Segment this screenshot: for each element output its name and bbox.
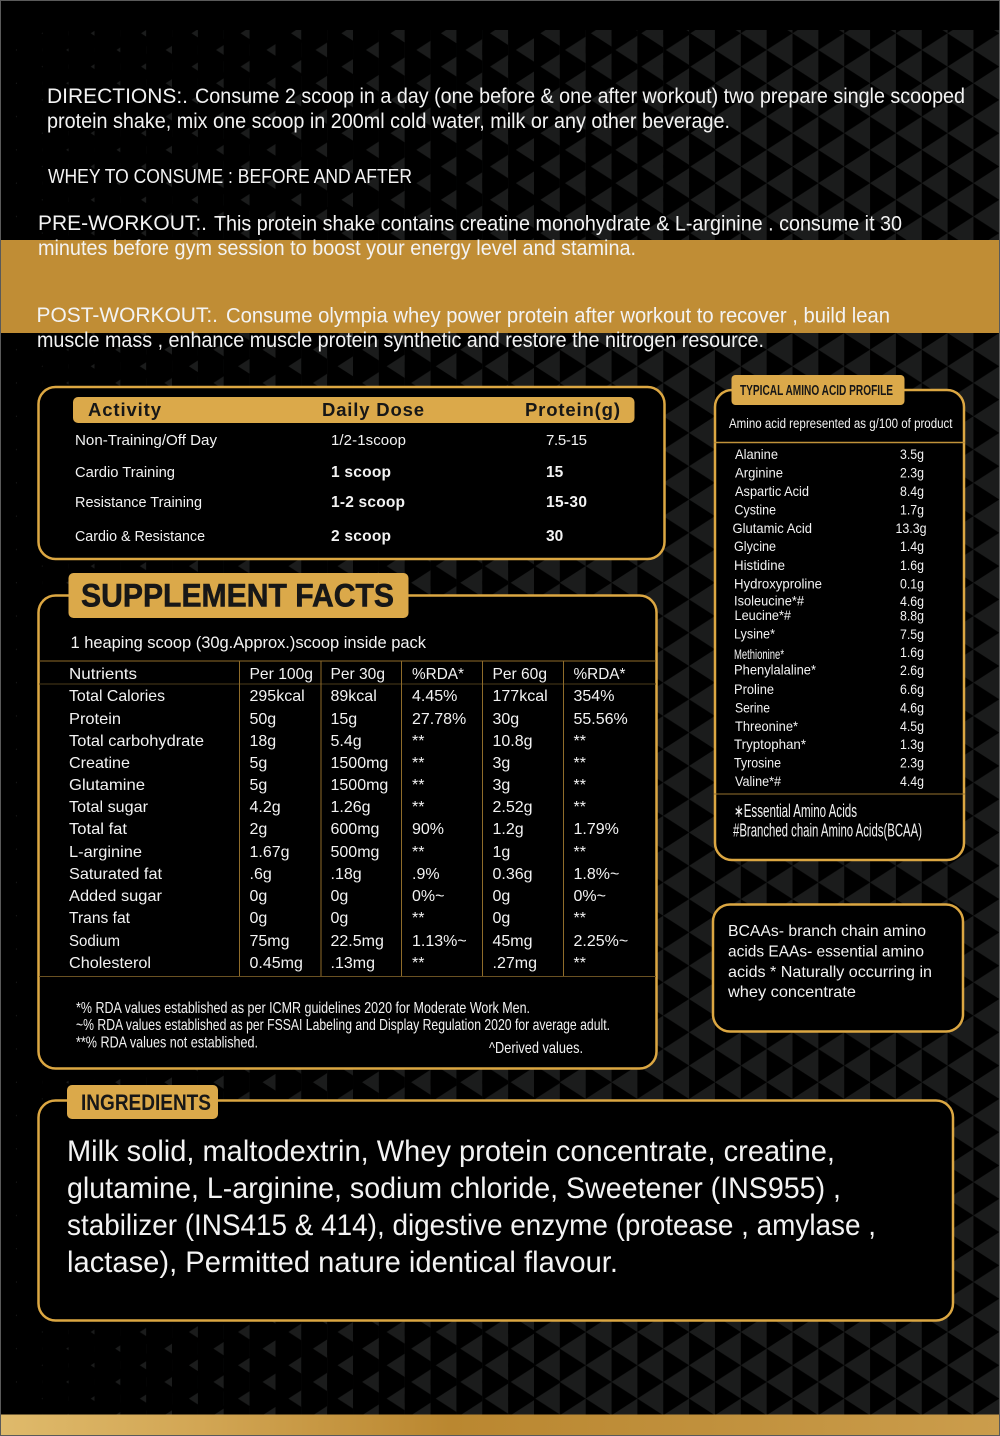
BCAA note text: whey concentrate <box>727 984 856 1001</box>
RDA footnotes: **% RDA values not established. <box>76 1034 258 1052</box>
nutrition facts table: 0.45mg <box>250 955 303 972</box>
nutrition facts table: 3g <box>492 777 510 794</box>
nutrition facts table: 1.26g <box>330 799 371 816</box>
nutrition facts table: ** <box>412 799 424 816</box>
nutrition facts table: .13mg <box>330 955 375 972</box>
pre-workout text block <box>38 211 902 260</box>
directions text block: protein shake, mix one scoop in 200ml cold water, milk or any other beverage. <box>47 110 730 133</box>
amino acid list: Hydroxyproline <box>734 576 822 592</box>
nutrition facts table: 1.67g <box>250 844 290 861</box>
nutrition facts table: 1500mg <box>330 755 388 772</box>
activity table rows: 2 scoop <box>331 528 391 545</box>
bottom gold gradient bar <box>0 1414 1000 1435</box>
nutrition facts table: Total fat <box>69 821 128 838</box>
BCAA note text <box>727 923 932 1001</box>
nutrition facts table: 5.4g <box>330 733 362 750</box>
amino acid list: Alanine <box>735 446 778 462</box>
nutrition facts table: 2.25%~ <box>574 933 628 950</box>
activity table header bar <box>73 397 634 423</box>
panel: BCAA note <box>713 904 963 1032</box>
amino acid list: 3.5g <box>900 446 924 462</box>
amino acid list: Leucine*# <box>734 607 791 623</box>
nutrition facts table: 4.45% <box>412 688 457 705</box>
activity table header bar: Activity <box>88 399 162 420</box>
nutrition facts table: Total sugar <box>69 799 149 816</box>
nutrition facts table: 75mg <box>250 933 290 950</box>
activity table rows: 30 <box>546 528 563 545</box>
ingredients text: stabilizer (INS415 & 414), digestive enzyme (protease , amylase , <box>67 1209 876 1242</box>
nutrition facts table: 27.78% <box>412 711 466 728</box>
nutrition facts table: ** <box>574 910 586 927</box>
nutrition facts table: Sodium <box>69 933 120 950</box>
amino acid list: 4.4g <box>900 773 924 789</box>
post-workout text block <box>36 303 890 352</box>
activity table rows: Non-Training/Off Day <box>75 432 218 449</box>
nutrition facts table: ** <box>574 733 586 750</box>
nutrition facts table: 354% <box>574 688 614 705</box>
post-workout text block: POST-WORKOUT:. <box>36 303 218 327</box>
post-workout text block: muscle mass , enhance muscle protein synthetic and restore the nitrogen resource. <box>37 329 764 352</box>
amino acid footnotes: ∗Essential Amino Acids <box>734 801 857 821</box>
nutrition facts table: 30g <box>492 711 519 728</box>
amino acid list: 7.5g <box>900 626 924 642</box>
directions text block: Consume 2 scoop in a day (one before & one after workout) two prepare single scooped <box>195 85 965 108</box>
nutrition facts table: ** <box>574 955 586 972</box>
amino acid list: 0.1g <box>900 576 924 592</box>
amino acid list: Methionine* <box>734 646 784 662</box>
amino acid list: Valine*# <box>735 773 781 789</box>
pre-workout text block: This protein shake contains creatine monohydrate & L-arginine . consume it 30 <box>214 212 902 236</box>
nutrition facts table: 295kcal <box>250 688 305 705</box>
amino acid list: Serine <box>735 700 770 716</box>
nutrition facts table: Nutrients <box>69 666 137 683</box>
RDA footnotes <box>76 1000 610 1057</box>
nutrition facts table: 0%~ <box>574 888 606 905</box>
amino acid subtitle: Amino acid represented as g/100 of product <box>729 416 953 431</box>
nutrition facts table: 5g <box>250 777 267 794</box>
nutrition facts table: 1.13%~ <box>412 933 467 950</box>
amino acid list: Isoleucine*# <box>734 592 804 608</box>
nutrition facts table: Per 100g <box>250 666 313 683</box>
nutrition facts table: 50g <box>250 711 276 728</box>
nutrition facts table: 2g <box>250 821 267 838</box>
RDA footnotes: *% RDA values established as per ICMR guidelines 2020 for Moderate Work Men. <box>76 1000 530 1017</box>
amino acid list: Arginine <box>735 464 783 480</box>
nutrition facts table: Total Calories <box>69 688 165 705</box>
activity table header bar: Protein(g) <box>525 399 620 420</box>
amino acid list: Proline <box>734 681 774 697</box>
nutrition facts table: %RDA* <box>412 666 464 683</box>
nutrition facts table: 3g <box>492 755 510 772</box>
amino acid list: 4.5g <box>900 718 924 734</box>
amino acid list: 2.3g <box>900 754 924 770</box>
nutrition facts table: Saturated fat <box>69 866 163 883</box>
BCAA note text: BCAAs- branch chain amino <box>728 923 926 940</box>
ingredients text: lactase), Permitted nature identical flavour. <box>67 1246 618 1279</box>
nutrition facts table: ** <box>574 755 586 772</box>
activity table rows: 7.5-15 <box>546 432 587 449</box>
nutrition facts table: Per 60g <box>492 666 547 683</box>
nutrition facts table: ** <box>412 777 424 794</box>
activity table rows: Cardio & Resistance <box>75 528 205 545</box>
nutrition facts table: ** <box>574 844 586 861</box>
nutrition facts table: 10.8g <box>492 733 533 750</box>
nutrition facts table: 4.2g <box>250 799 281 816</box>
panel: daily protein activity table <box>38 387 664 559</box>
activity table rows: Resistance Training <box>75 494 202 511</box>
ingredients heading label: INGREDIENTS <box>81 1090 211 1115</box>
nutrition facts table: ** <box>412 755 424 772</box>
nutrition facts table: 1.2g <box>492 821 524 838</box>
activity table rows: 15-30 <box>546 494 587 511</box>
amino acid list: Cystine <box>734 502 776 518</box>
nutrition facts table: Cholesterol <box>69 955 151 972</box>
amino acid list: Glutamic Acid <box>732 520 812 536</box>
nutrition facts table: 0g <box>250 910 267 927</box>
ingredients text <box>67 1135 876 1279</box>
pre-workout text block: minutes before gym session to boost your energy level and stamina. <box>38 237 636 260</box>
nutrition facts table: ** <box>574 799 586 816</box>
BCAA note text: acids EAAs- essential amino <box>728 944 924 960</box>
supplement facts heading label: SUPPLEMENT FACTS <box>81 578 394 614</box>
panel: typical amino acid profile <box>714 375 965 860</box>
amino acid list: 6.6g <box>900 681 924 697</box>
when to consume heading: WHEY TO CONSUME : BEFORE AND AFTER <box>48 165 412 188</box>
amino acid list: Tyrosine <box>734 754 781 770</box>
nutrition facts table: L-arginine <box>69 844 142 861</box>
nutrition facts table: 0.36g <box>492 866 533 883</box>
nutrition facts table: 5g <box>250 755 267 772</box>
nutrition facts table: ** <box>574 777 586 794</box>
pre-workout text block: PRE-WORKOUT:. <box>38 211 207 235</box>
nutrition facts table: 15g <box>330 711 357 728</box>
nutrition facts table: 18g <box>250 733 276 750</box>
activity table rows: Cardio Training <box>75 464 175 481</box>
nutrition facts table: Added sugar <box>69 888 163 905</box>
ingredients heading label <box>67 1085 218 1119</box>
amino acid list: Aspartic Acid <box>735 483 809 499</box>
nutrition facts table: Protein <box>69 711 121 728</box>
amino acid list: 1.3g <box>900 736 924 752</box>
nutrition facts table: 1g <box>492 844 510 861</box>
amino acid list: 4.6g <box>900 700 924 716</box>
amino acid footnotes <box>733 801 922 840</box>
amino acid list: 8.8g <box>900 608 924 624</box>
amino acid list: 1.7g <box>900 502 924 518</box>
amino acid list: Phenylalaline* <box>734 662 817 678</box>
amino acid list <box>732 446 926 789</box>
amino acid list: 2.3g <box>900 464 924 480</box>
amino acid list: 4.6g <box>900 593 924 609</box>
nutrition facts table: 1.79% <box>574 821 619 838</box>
nutrition facts table <box>69 666 628 972</box>
gold band behind workout text <box>0 240 1000 333</box>
panel: ingredients <box>38 1085 953 1320</box>
nutrition facts table: Total carbohydrate <box>69 733 204 750</box>
serving size line: 1 heaping scoop (30g.Approx.)scoop inside pack <box>70 634 427 652</box>
amino acid list: 1.6g <box>900 557 924 573</box>
nutrition facts table: ** <box>412 955 424 972</box>
amino acid list: Tryptophan* <box>734 736 807 752</box>
activity table rows: 15 <box>546 464 564 481</box>
nutrition facts table: 2.52g <box>492 799 533 816</box>
activity table rows <box>75 432 587 545</box>
post-workout text block: Consume olympia whey power protein after workout to recover , build lean <box>226 304 890 328</box>
nutrition facts table: Per 30g <box>330 666 385 683</box>
RDA footnotes: ^Derived values. <box>489 1040 583 1057</box>
nutrition facts table: 22.5mg <box>330 933 384 950</box>
amino acid list: 1.6g <box>900 644 924 660</box>
amino acid list: Glycine <box>734 538 776 554</box>
nutrition facts table: 600mg <box>330 821 379 838</box>
nutrition facts table: ** <box>412 733 424 750</box>
nutrition facts table: 90% <box>412 821 444 838</box>
amino acid list: Threonine* <box>735 718 798 734</box>
nutrition facts table: 0g <box>492 910 510 927</box>
activity table rows: 1 scoop <box>331 464 391 481</box>
nutrition facts table: 1500mg <box>330 777 388 794</box>
ingredients text: Milk solid, maltodextrin, Whey protein concentrate, creatine, <box>67 1135 835 1168</box>
nutrition facts table: 89kcal <box>330 688 377 705</box>
nutrition facts table: .27mg <box>492 955 537 972</box>
nutrition facts table: 0g <box>492 888 510 905</box>
amino acid list: 2.6g <box>900 662 924 678</box>
nutrition facts table: ** <box>412 844 424 861</box>
nutrition facts table: .9% <box>412 866 440 883</box>
nutrition facts table: 0%~ <box>412 888 444 905</box>
nutrition facts table: .6g <box>250 866 272 883</box>
amino acid profile heading label: TYPICAL AMINO ACID PROFILE <box>740 383 893 399</box>
nutrition facts table: 55.56% <box>574 711 628 728</box>
nutrition facts table: Glutamine <box>69 777 145 794</box>
activity table rows: 1-2 scoop <box>331 494 405 511</box>
nutrition facts table: 500mg <box>330 844 379 861</box>
BCAA note text: acids * Naturally occurring in <box>728 964 932 981</box>
nutrition facts table: Creatine <box>69 755 130 772</box>
amino acid profile heading label <box>732 375 904 405</box>
nutrition facts table: .18g <box>330 866 362 883</box>
directions text block: DIRECTIONS:. <box>47 84 188 108</box>
ingredients text: glutamine, L-arginine, sodium chloride, Sweetener (INS955) , <box>67 1172 841 1205</box>
nutrition facts table: 1.8%~ <box>574 866 619 883</box>
nutrition facts table: 0g <box>330 888 348 905</box>
RDA footnotes: ~% RDA values established as per FSSAI Labeling and Display Regulation 2020 for average adult. <box>76 1017 610 1034</box>
directions text block <box>47 84 965 133</box>
nutrition facts table: 0g <box>330 910 348 927</box>
amino acid list: 13.3g <box>896 520 926 536</box>
panel: supplement facts <box>38 573 656 1068</box>
nutrition facts table: %RDA* <box>574 666 626 683</box>
activity table header bar: Daily Dose <box>322 399 424 420</box>
nutrition facts table: Trans fat <box>69 910 131 927</box>
nutrition facts table: 177kcal <box>492 688 548 705</box>
amino acid list: 8.4g <box>900 483 924 499</box>
amino acid list: Histidine <box>734 557 785 573</box>
nutrition facts table: 45mg <box>492 933 533 950</box>
amino acid list: 1.4g <box>900 538 924 554</box>
nutrition facts table: ** <box>412 910 424 927</box>
amino acid list: Lysine* <box>734 626 775 642</box>
nutrition facts table: 0g <box>250 888 267 905</box>
activity table rows: 1/2-1scoop <box>331 432 406 449</box>
